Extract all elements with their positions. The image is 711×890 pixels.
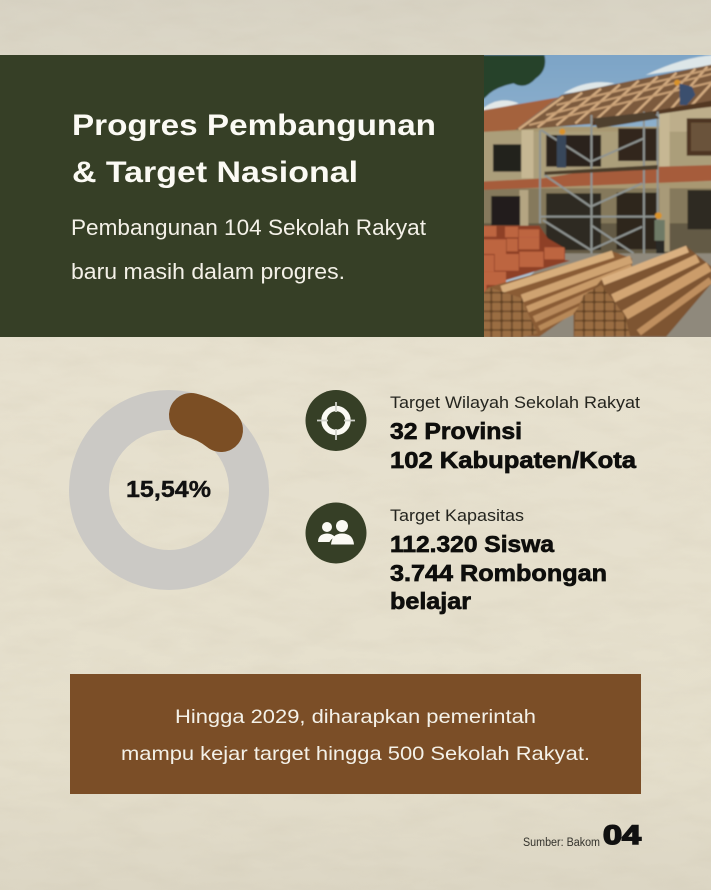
block: target kapasitas: 112.320 Siswa	[390, 531, 555, 557]
windows	[493, 144, 521, 172]
callout: mampu kejar target hingga 500 Sekolah Rakyat.	[121, 743, 590, 765]
block: target wilayah: Target Wilayah Sekolah Rakyat	[390, 394, 640, 412]
scaffolding	[540, 112, 658, 260]
subtitle: baru masih dalam progres.	[71, 259, 345, 284]
lumber left	[481, 252, 632, 337]
source: Sumber: Bakom	[523, 837, 600, 849]
block: target kapasitas: 3.744 Rombongan	[390, 560, 607, 586]
block: target kapasitas: belajar	[390, 588, 471, 614]
donut value: 15,54%	[126, 476, 211, 502]
bricks	[481, 226, 570, 293]
callout	[70, 674, 641, 794]
subtitle	[71, 215, 426, 284]
walls	[488, 126, 711, 190]
callout: Hingga 2029, diharapkan pemerintah	[175, 706, 536, 728]
icon: people	[306, 502, 366, 564]
page number: 04	[603, 820, 641, 850]
roofs	[481, 97, 558, 132]
header panel	[0, 55, 484, 337]
ground	[481, 253, 711, 340]
photo: school construction	[481, 50, 711, 340]
block: target wilayah: 102 Kabupaten/Kota	[390, 447, 637, 473]
lumber right	[574, 247, 711, 337]
block: target kapasitas: Target Kapasitas	[390, 507, 524, 525]
tree	[481, 55, 545, 102]
icon: target	[306, 390, 366, 451]
title: Progres Pembangunan	[72, 109, 436, 142]
block: target wilayah: 32 Provinsi	[390, 418, 522, 444]
donut chart	[89, 410, 249, 570]
block: target wilayah	[390, 394, 640, 473]
title	[72, 109, 436, 189]
block: target kapasitas	[390, 507, 607, 614]
workers	[559, 129, 565, 135]
title: & Target Nasional	[72, 156, 358, 189]
subtitle: Pembangunan 104 Sekolah Rakyat	[71, 215, 426, 240]
